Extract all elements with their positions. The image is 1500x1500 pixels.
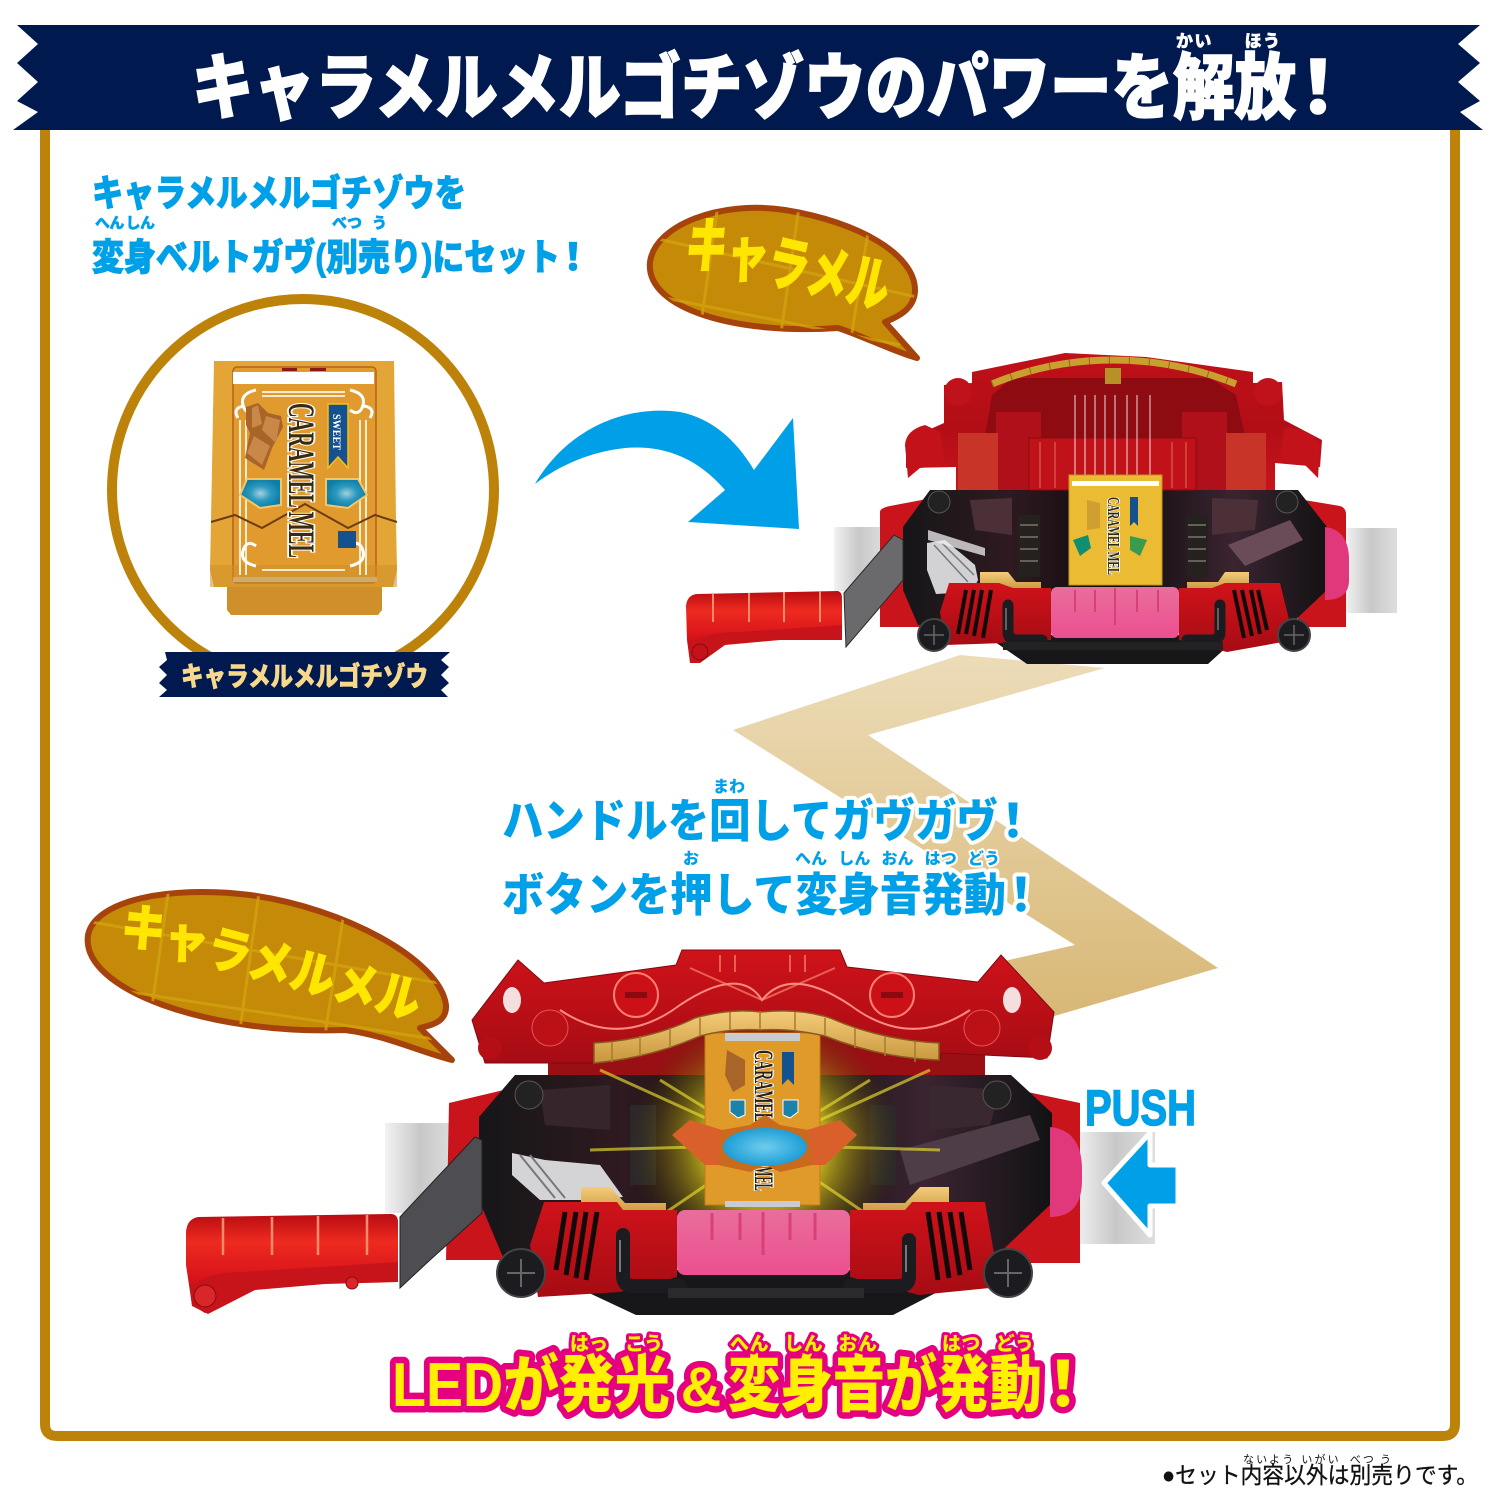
- set cartridge: [1069, 475, 1162, 585]
- bottom black base: [540, 1270, 980, 1315]
- pipes: [1008, 605, 1220, 640]
- callout exclamation: ！: [1032, 1351, 1094, 1420]
- sweet text: SWEET: [330, 414, 344, 450]
- callout furigana: はっ: [570, 1334, 608, 1355]
- red handle: [186, 1214, 398, 1313]
- pink side: [1325, 527, 1349, 600]
- decorative lines: [240, 392, 366, 575]
- belt: open with Gochizo set: [686, 353, 1397, 664]
- furigana mawa: まわ: [713, 778, 745, 796]
- gold accents: [980, 572, 1249, 590]
- pipes: [623, 1235, 909, 1286]
- caramel text: CARAMEL MEL: [280, 403, 321, 558]
- cartridge body: [210, 361, 397, 587]
- side plates: [446, 1088, 1080, 1263]
- body highlights: [1228, 520, 1303, 566]
- side vents: [1018, 515, 1040, 577]
- crown top ribs: [690, 955, 835, 1000]
- screws: [515, 1081, 543, 1109]
- callout text right: 変身音が発動: [728, 1350, 1042, 1420]
- light rays: [1075, 395, 1150, 478]
- line one: ハンドルを回してガヴガヴ: [502, 795, 998, 847]
- gold accents: [581, 1187, 949, 1215]
- arrow: blue curved: [535, 411, 799, 529]
- seam zigzag: [211, 504, 397, 528]
- line one: キャラメルメルゴチゾウを: [92, 172, 466, 214]
- line two: 変身ベルトガヴ(別売り)にセット: [92, 236, 560, 278]
- blue gems: [240, 479, 281, 508]
- gavv blue eye: [723, 1128, 807, 1166]
- crown: [472, 950, 1054, 1063]
- wheels: [918, 619, 950, 651]
- bubble text: キャラメルメル: [115, 897, 427, 1030]
- line two exclamation: ！: [554, 237, 592, 278]
- silver plate: [512, 1153, 623, 1200]
- side vents: [630, 1105, 656, 1185]
- front red right: [1179, 583, 1294, 652]
- line two: ボタンを押して変身音発動: [502, 869, 1006, 921]
- caramel cubes: [245, 403, 283, 470]
- top red housing: [906, 353, 1322, 490]
- footnote: ●セット内容以外は別売りです。: [1162, 1462, 1478, 1488]
- instruction text: set the Gochizo: [92, 172, 592, 278]
- pink button: [677, 1210, 850, 1275]
- callout furigana hen shin on: へん しん おん: [730, 1333, 877, 1355]
- callout: LED and sound: [392, 1332, 1094, 1420]
- pink side: [1050, 1127, 1082, 1217]
- small id mark: [338, 531, 356, 548]
- silver plate: [927, 540, 978, 594]
- speech bubble: caramel: [646, 204, 920, 361]
- instruction text: turn handle: [502, 778, 1044, 921]
- gavv mouth: [718, 1115, 812, 1172]
- furigana: へんしん: [95, 215, 155, 232]
- led glow: [630, 1010, 900, 1280]
- vents: [958, 590, 1267, 638]
- strap left: [385, 1123, 455, 1213]
- cartridge base: [227, 585, 382, 615]
- front red left: [940, 583, 1051, 645]
- banner ribbon: [13, 25, 1483, 130]
- zigzag path background: [733, 655, 1218, 1032]
- line two exclamation: ！: [998, 869, 1044, 921]
- title text: キャラメルメルゴチゾウのパワーを解放: [192, 49, 1296, 129]
- furigana o: お: [683, 850, 699, 868]
- strap right: [1345, 528, 1397, 613]
- arrow: push left: [1104, 1133, 1178, 1235]
- cartridge text: CARAMEL MEL: [1104, 497, 1123, 575]
- lower black base: [985, 635, 1240, 664]
- circle panel: Gochizo: [112, 299, 494, 681]
- callout ampersand: &: [681, 1355, 721, 1418]
- gold trim: [594, 1011, 939, 1063]
- sweet ribbon: [328, 404, 348, 468]
- furigana u: う: [372, 215, 387, 232]
- gold trim: [992, 360, 1236, 384]
- belt: activated with LED: MEL: [749, 1166, 778, 1191]
- side plates: [880, 499, 1346, 627]
- label: push: PUSH: [1085, 1080, 1196, 1136]
- screws: [928, 491, 950, 513]
- bubble text: キャラメル: [679, 209, 897, 321]
- title furigana: かい ほう: [1176, 32, 1280, 51]
- furigana hen shin on hatsu dou: へん しん おん はつ どう: [795, 849, 1000, 868]
- interior shade: [985, 378, 1245, 438]
- side lugs: [905, 425, 945, 478]
- speech bubble: caramel mel: [80, 880, 452, 1060]
- front red left: [530, 1202, 677, 1297]
- body highlights: [900, 1115, 1040, 1185]
- inserted cartridge: [705, 1033, 820, 1205]
- crown lugs: [478, 1036, 502, 1060]
- center block: [1029, 438, 1196, 490]
- red handle: [686, 591, 842, 662]
- furigana betsu: べつ: [332, 215, 362, 232]
- strap left: [834, 527, 884, 591]
- callout text left: LEDが発光: [392, 1350, 670, 1420]
- black mechanism: [903, 490, 1327, 625]
- item: caramel Gochizo cartridge: [210, 361, 397, 615]
- blocks: [996, 412, 1041, 490]
- wheels: [497, 1249, 545, 1297]
- crown highlights: [560, 984, 970, 1029]
- footnote: [1162, 1452, 1478, 1488]
- strap right: [1075, 1132, 1155, 1244]
- title exclamation: ！: [1282, 49, 1354, 129]
- cartridge text caramel: CARAMEL: [749, 1050, 778, 1122]
- label text: キャラメルメルゴチゾウ: [181, 661, 428, 692]
- label: item name ribbon: [159, 652, 450, 697]
- callout furigana kou: こう: [625, 1333, 663, 1355]
- footnote furigana: ないよう いがい べつ う: [1243, 1452, 1391, 1466]
- gavv orange fins: [672, 1120, 722, 1165]
- dark red housing: [548, 1030, 985, 1078]
- pink button: [1051, 587, 1179, 638]
- line one exclamation: ！: [990, 795, 1036, 847]
- vents: [556, 1212, 970, 1280]
- grey arm: [400, 1137, 482, 1288]
- black mechanism: [479, 1075, 1052, 1262]
- callout furigana hatsu dou: はつ どう: [942, 1332, 1034, 1355]
- grey arm: [844, 535, 903, 647]
- front red right: [850, 1202, 1000, 1295]
- belt: activated with LED: [186, 950, 1155, 1315]
- title banner: [13, 25, 1483, 130]
